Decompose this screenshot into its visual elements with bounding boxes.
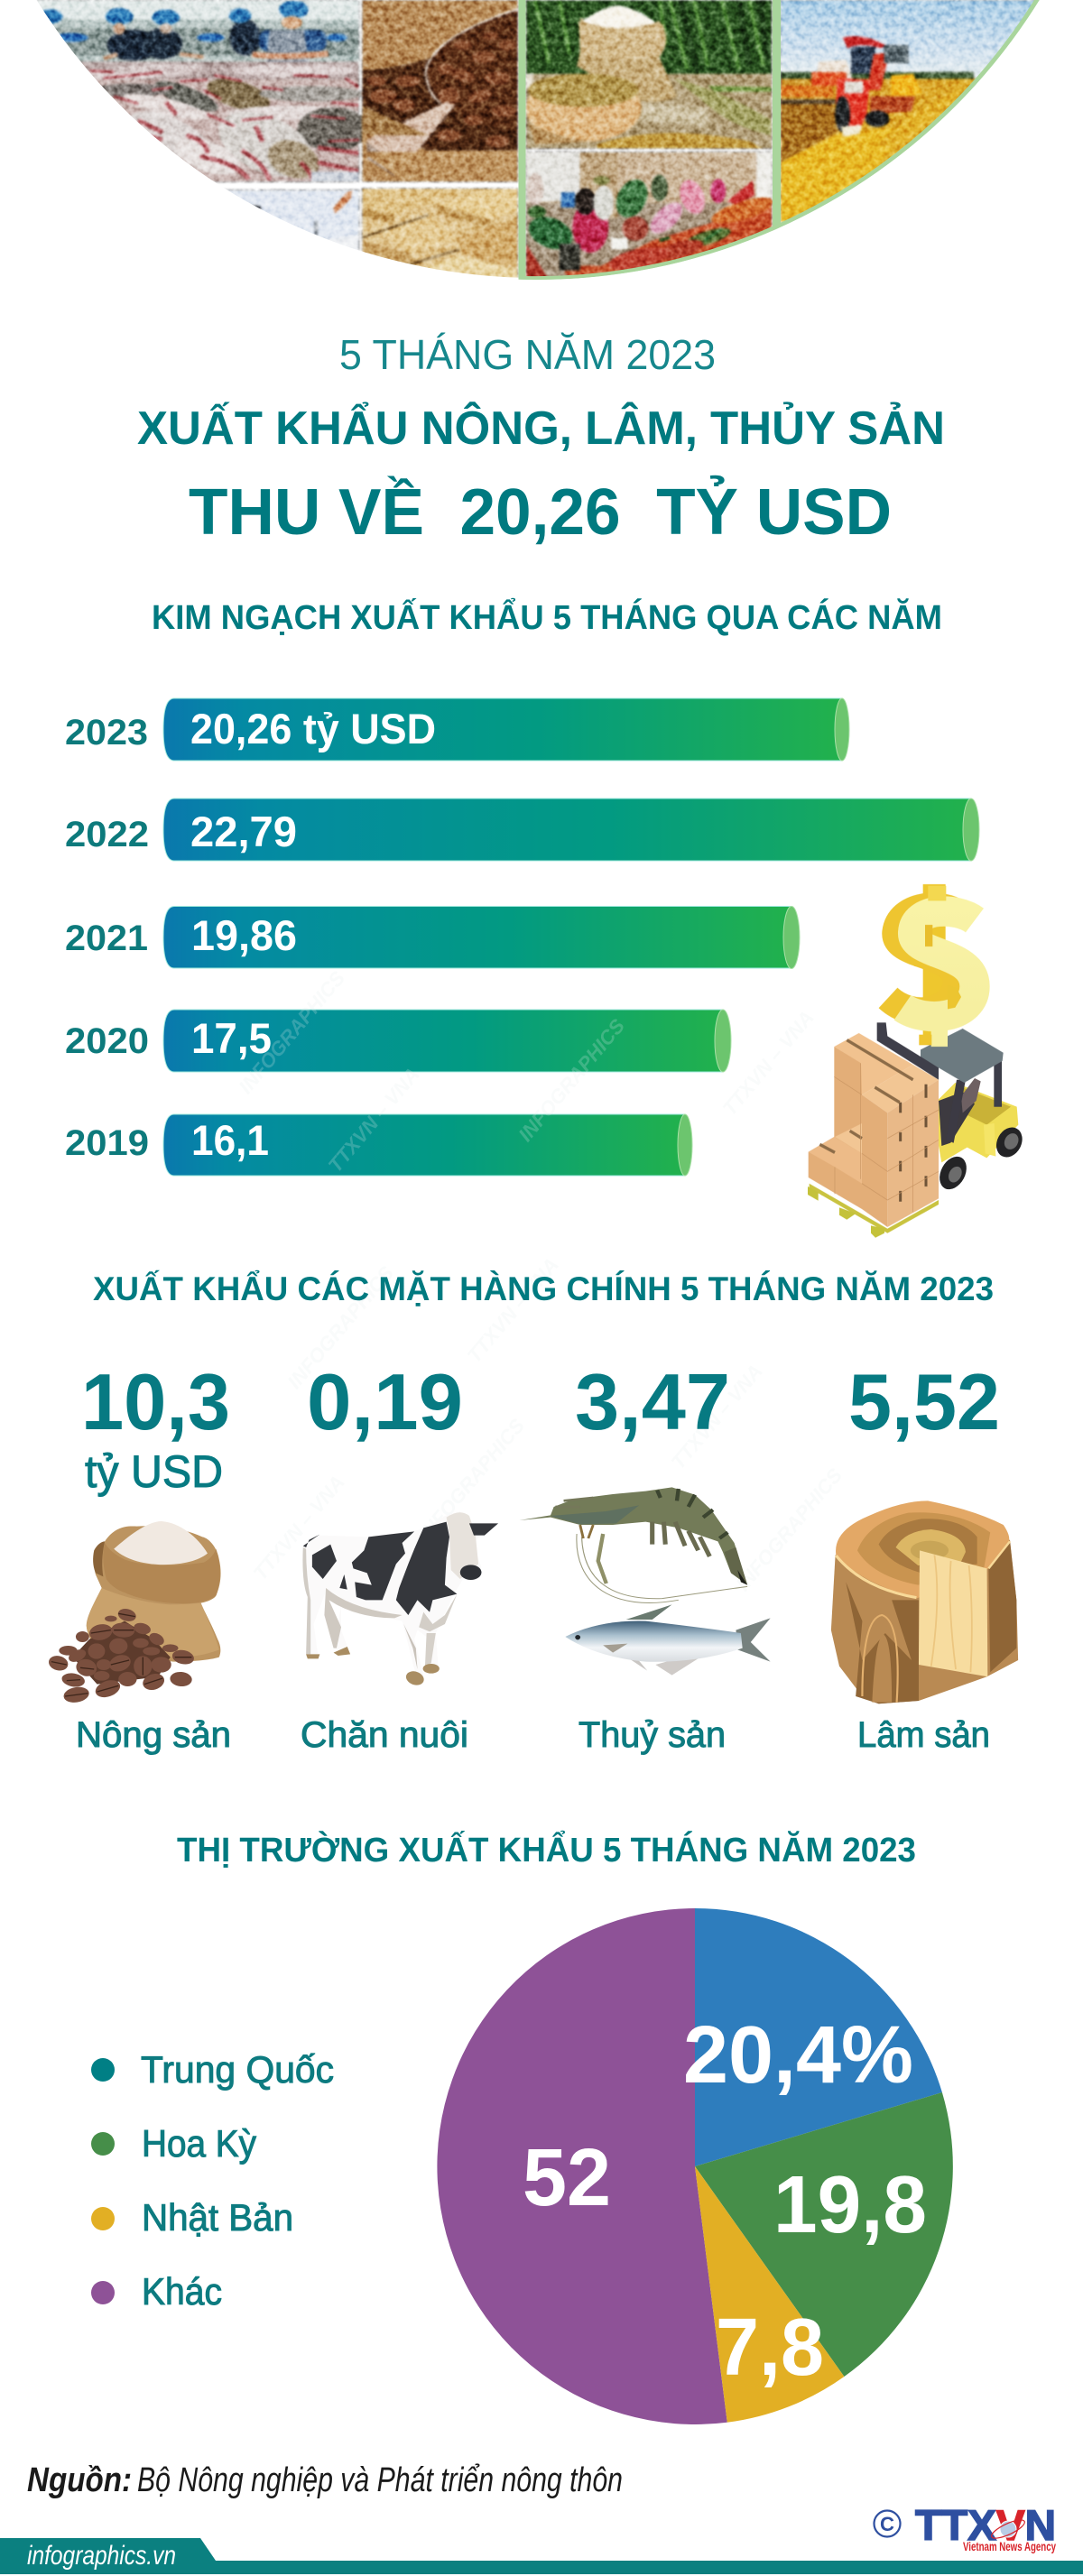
value: fishery xyxy=(575,1357,730,1755)
slice: Nhật Bản 7,8 xyxy=(695,2166,844,2423)
bar chart: export value by year xyxy=(65,698,979,1176)
bar: 2023 xyxy=(65,698,849,761)
infographic canvas: TTXVN – VNA xyxy=(249,1471,349,1584)
stack of cartons on pallet xyxy=(808,1033,939,1238)
infographic canvas: TTXVN – VNA xyxy=(667,1360,767,1473)
legend item: Hoa Kỳ xyxy=(91,2122,256,2165)
bar: 2020 xyxy=(65,1010,731,1072)
icon: rice sack and coffee beans xyxy=(47,1521,221,1704)
photo: sawn wood planks xyxy=(362,189,518,282)
value: 19,8: 19,8 xyxy=(773,2160,927,2250)
value: agricultural: tỷ USD xyxy=(85,1446,223,1497)
legend item: Trung Quốc: Trung Quốc xyxy=(141,2048,334,2091)
value: 52: 52 xyxy=(523,2133,611,2223)
photo: rice sack and bowl xyxy=(525,0,772,149)
slice: Khác 52 xyxy=(437,1908,727,2424)
bar: 2022: 22,79 xyxy=(190,808,297,855)
infographic canvas: INFOGRAPHICS xyxy=(234,966,349,1098)
logo: TTXVN Vietnam News Agency: C xyxy=(880,2513,894,2535)
value: forestry xyxy=(848,1357,1000,1755)
icon: pangasius fish xyxy=(565,1604,771,1676)
infographic canvas: INFOGRAPHICS xyxy=(282,1261,398,1393)
title: period: 5 THÁNG NĂM 2023 xyxy=(339,331,716,378)
photo: combine harvester in rice field xyxy=(781,0,1057,223)
icon: shrimp xyxy=(519,1487,747,1602)
separators and green arc xyxy=(518,0,1040,289)
icon: dairy cow xyxy=(302,1511,498,1687)
photo: coffee beans and burlap xyxy=(362,0,518,182)
icon: gold dollar above forklift with boxes xyxy=(808,884,1027,1238)
forklift body xyxy=(877,1022,1027,1194)
value: agricultural xyxy=(76,1357,231,1755)
heading: main export goods: XUẤT KHẨU CÁC MẶT HÀNG CHÍNH 5 THÁNG NĂM 2023 xyxy=(93,1270,994,1307)
value: forestry: 5,52 xyxy=(848,1357,1000,1446)
panel: export goods values xyxy=(76,1357,1000,1755)
value: livestock: Chăn nuôi xyxy=(301,1715,468,1755)
title: main line: XUẤT KHẨU NÔNG, LÂM, THỦY SẢN xyxy=(137,402,945,455)
pie chart: export markets xyxy=(437,1908,953,2424)
value: livestock xyxy=(301,1357,468,1755)
value: fishery: 3,47 xyxy=(575,1357,730,1446)
photo: white tabletop panel xyxy=(225,188,361,251)
bar: 2020: 2020 xyxy=(65,1021,149,1061)
coffee beans xyxy=(47,1607,195,1704)
infographic canvas: TTXVN – VNA xyxy=(463,1253,563,1367)
title: headline figure: THU VỀ 20,26 TỶ USD xyxy=(189,475,892,549)
value: 7,8: 7,8 xyxy=(716,2303,824,2393)
dollar sign xyxy=(888,884,975,1047)
value: forestry: Lâm sản xyxy=(857,1715,990,1755)
legend item: Khác xyxy=(91,2270,222,2313)
source note: Bộ Nông nghiệp và Phát triển nông thôn xyxy=(137,2461,623,2499)
bar: 2023: 20,26 tỷ USD xyxy=(190,705,436,752)
source note: Nguồn: xyxy=(27,2461,132,2499)
heading: export markets: THỊ TRƯỜNG XUẤT KHẨU 5 THÁNG NĂM 2023 xyxy=(177,1829,916,1870)
legend: markets xyxy=(91,2048,334,2313)
legend item: Khác: Khác xyxy=(142,2270,222,2313)
photo: lychee sellers xyxy=(522,152,777,280)
footer bar with site name: infographics.vn xyxy=(27,2541,176,2571)
legend item: Hoa Kỳ: Hoa Kỳ xyxy=(142,2122,256,2165)
source note xyxy=(27,2461,623,2499)
legend item: Nhật Bản: Nhật Bản xyxy=(142,2196,293,2239)
bar: 2021: 2021 xyxy=(65,919,148,958)
heading: export value by year: KIM NGẠCH XUẤT KHẨU 5 THÁNG QUA CÁC NĂM xyxy=(152,596,942,637)
slice: Trung Quốc 20,4% xyxy=(695,1908,942,2166)
bar: 2019: 16,1 xyxy=(191,1116,269,1164)
bar: 2022: 2022 xyxy=(65,815,149,854)
value: fishery: Thuỷ sản xyxy=(579,1715,726,1755)
bar: 2023: 2023 xyxy=(65,713,148,752)
footer bar with site name xyxy=(0,2538,1083,2574)
logo: TTXVN Vietnam News Agency: TTXVN xyxy=(915,2501,1056,2549)
value: livestock: 0,19 xyxy=(307,1357,463,1446)
value: agricultural: Nông sản xyxy=(76,1715,231,1755)
value: agricultural: 10,3 xyxy=(81,1357,230,1446)
bar: 2021 xyxy=(65,906,800,969)
panel: header photo montage xyxy=(0,0,1057,289)
bar: 2019: 2019 xyxy=(65,1123,149,1163)
infographic canvas: INFOGRAPHICS xyxy=(514,1014,629,1146)
icon: wood stump with cut plank xyxy=(831,1500,1018,1703)
infographic canvas: TTXVN – VNA xyxy=(718,1006,819,1120)
infographic canvas: TTXVN – VNA xyxy=(324,1063,424,1177)
bar: 2020: 17,5 xyxy=(191,1014,272,1062)
bar: 2019 xyxy=(65,1114,692,1176)
slice: Hoa Kỳ 19,8 xyxy=(695,2092,953,2377)
infographic canvas: INFOGRAPHICS xyxy=(731,1463,847,1595)
value: 20,4%: 20,4% xyxy=(683,2010,913,2101)
bar: 2021: 19,86 xyxy=(191,911,297,959)
bar: 2022 xyxy=(65,799,979,861)
infographic canvas: INFOGRAPHICS xyxy=(413,1414,529,1546)
photo: fish processing workers xyxy=(36,0,365,184)
